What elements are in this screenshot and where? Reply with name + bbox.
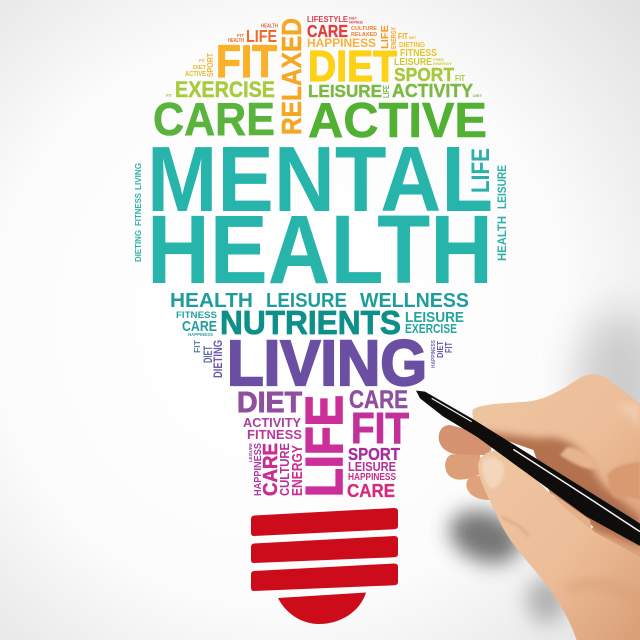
middle word cloud: teal words: HAPPINESS bbox=[188, 332, 213, 337]
lower word cloud: magenta words: CARE bbox=[349, 387, 408, 414]
top word cloud: warm words: FIT bbox=[398, 31, 409, 41]
top word cloud: warm words: FIT bbox=[237, 33, 244, 38]
top word cloud: warm words: RELAXED bbox=[276, 18, 307, 135]
top word cloud: warm words: FIT bbox=[166, 93, 172, 98]
side words around the heading: DIETING bbox=[133, 230, 143, 262]
top word cloud: warm words: FITNESS bbox=[433, 58, 444, 62]
top word cloud: warm words: DIET bbox=[409, 36, 417, 40]
top word cloud: warm words: ACTIVE bbox=[308, 93, 487, 148]
side words around the heading: HEALTH bbox=[495, 216, 509, 261]
top word cloud: warm words: FIT bbox=[199, 58, 205, 63]
middle word cloud: teal words: LEISURE bbox=[266, 290, 347, 312]
top word cloud: warm words: SPORT bbox=[394, 65, 454, 86]
lower word cloud: magenta words: HAPPINESS bbox=[348, 472, 396, 483]
top word cloud: warm words: CARE bbox=[153, 93, 275, 145]
top word cloud: warm words: DIET bbox=[308, 43, 397, 91]
top word cloud: warm words: LIFESTYLE bbox=[307, 14, 348, 24]
lower word cloud: magenta words: CARE bbox=[260, 443, 282, 496]
living word cloud: purple words: FIT bbox=[192, 339, 202, 353]
side words around the heading: LIVING bbox=[133, 163, 143, 190]
top word cloud: warm words: LEISURE bbox=[308, 81, 382, 101]
top word cloud: warm words: HEALTH bbox=[228, 38, 244, 44]
lower word cloud: magenta words: LIFE bbox=[296, 395, 354, 497]
lower word cloud: magenta words: LEISURE bbox=[348, 459, 396, 474]
living word cloud: purple words: HAPPINESS bbox=[431, 340, 437, 368]
top word cloud: warm words: HAPPINESS bbox=[307, 37, 376, 50]
middle word cloud: teal words: HEALTH bbox=[170, 290, 253, 312]
top word cloud: warm words: ACTIVE bbox=[185, 71, 206, 78]
top word cloud: warm words: LIFE bbox=[381, 85, 391, 98]
top word cloud: warm words: LIFE bbox=[380, 25, 391, 49]
top word cloud: warm words: ENERGY bbox=[389, 27, 398, 49]
top word cloud: warm words: FIT bbox=[216, 36, 277, 87]
lower word cloud: magenta words: DIET bbox=[237, 387, 302, 419]
lower word cloud: magenta words bbox=[237, 387, 409, 502]
top word cloud: warm words: ENERGY bbox=[433, 62, 453, 66]
heading: mental health: MENTAL bbox=[147, 127, 493, 231]
top word cloud: warm words: LIFE bbox=[246, 26, 277, 46]
lower word cloud: magenta words: LEISURE bbox=[248, 443, 253, 462]
hand holding pen bbox=[416, 310, 640, 640]
middle word cloud: teal words: CARE bbox=[182, 319, 217, 335]
top word cloud: warm words: EXERCISE bbox=[175, 77, 275, 102]
middle word cloud: teal words bbox=[170, 290, 469, 342]
top word cloud: warm words: CARE bbox=[307, 21, 348, 41]
lower word cloud: magenta words: SPORT bbox=[348, 444, 400, 464]
top word cloud: warm words bbox=[153, 14, 487, 148]
top word cloud: warm words: CULTURE bbox=[351, 26, 377, 32]
top word cloud: warm words: HAPPINESS bbox=[349, 20, 363, 24]
lower word cloud: magenta words: CULTURE bbox=[277, 443, 292, 496]
lower word cloud: magenta words: CARE bbox=[347, 481, 395, 502]
side words around the heading: FITNESS bbox=[133, 193, 143, 226]
top word cloud: warm words: DIET bbox=[349, 16, 358, 20]
top word cloud: warm words: DIETING bbox=[399, 40, 425, 49]
side words around the heading bbox=[133, 148, 509, 262]
top word cloud: warm words: DIET bbox=[193, 65, 206, 71]
lower word cloud: magenta words: HAPPINESS bbox=[253, 443, 264, 496]
lower word cloud: magenta words: ACTIVITY bbox=[243, 415, 301, 430]
heading: mental health: HEALTH bbox=[147, 195, 493, 304]
top word cloud: warm words: RELAXED bbox=[351, 32, 377, 38]
top word cloud: warm words: FIT bbox=[455, 73, 466, 83]
middle word cloud: teal words: LEISURE bbox=[405, 310, 464, 326]
top word cloud: warm words: LEISURE bbox=[394, 57, 432, 68]
living word cloud: purple words: DIETING bbox=[212, 340, 225, 378]
pen bbox=[416, 391, 640, 546]
top word cloud: warm words: DIET bbox=[473, 94, 483, 98]
top word cloud: warm words: HEALTH bbox=[261, 24, 278, 30]
living word cloud: purple words: LIVING bbox=[227, 327, 427, 399]
side words around the heading: LIFE bbox=[468, 148, 495, 193]
side words around the heading: LEISURE bbox=[495, 165, 509, 209]
middle word cloud: teal words: FITNESS bbox=[176, 310, 217, 320]
middle word cloud: teal words: WELLNESS bbox=[360, 290, 469, 312]
top word cloud: warm words: SPORT bbox=[205, 52, 215, 77]
lower word cloud: magenta words: FITNESS bbox=[247, 427, 302, 442]
living word cloud: purple words: FIT bbox=[444, 341, 455, 353]
middle word cloud: teal words: NUTRIENTS bbox=[220, 305, 401, 342]
top word cloud: warm words: ACTIVITY bbox=[392, 81, 473, 102]
living word cloud: purple words: DIET bbox=[202, 346, 215, 363]
lower word cloud: magenta words: ENERGY bbox=[290, 445, 306, 496]
top word cloud: warm words: FITNESS bbox=[400, 48, 437, 59]
living word cloud: purple words: DIET bbox=[435, 340, 445, 358]
heading: mental health bbox=[147, 127, 493, 304]
light bulb base bbox=[251, 508, 398, 624]
lower word cloud: magenta words: FIT bbox=[351, 405, 409, 453]
middle word cloud: teal words: EXERCISE bbox=[405, 321, 457, 336]
